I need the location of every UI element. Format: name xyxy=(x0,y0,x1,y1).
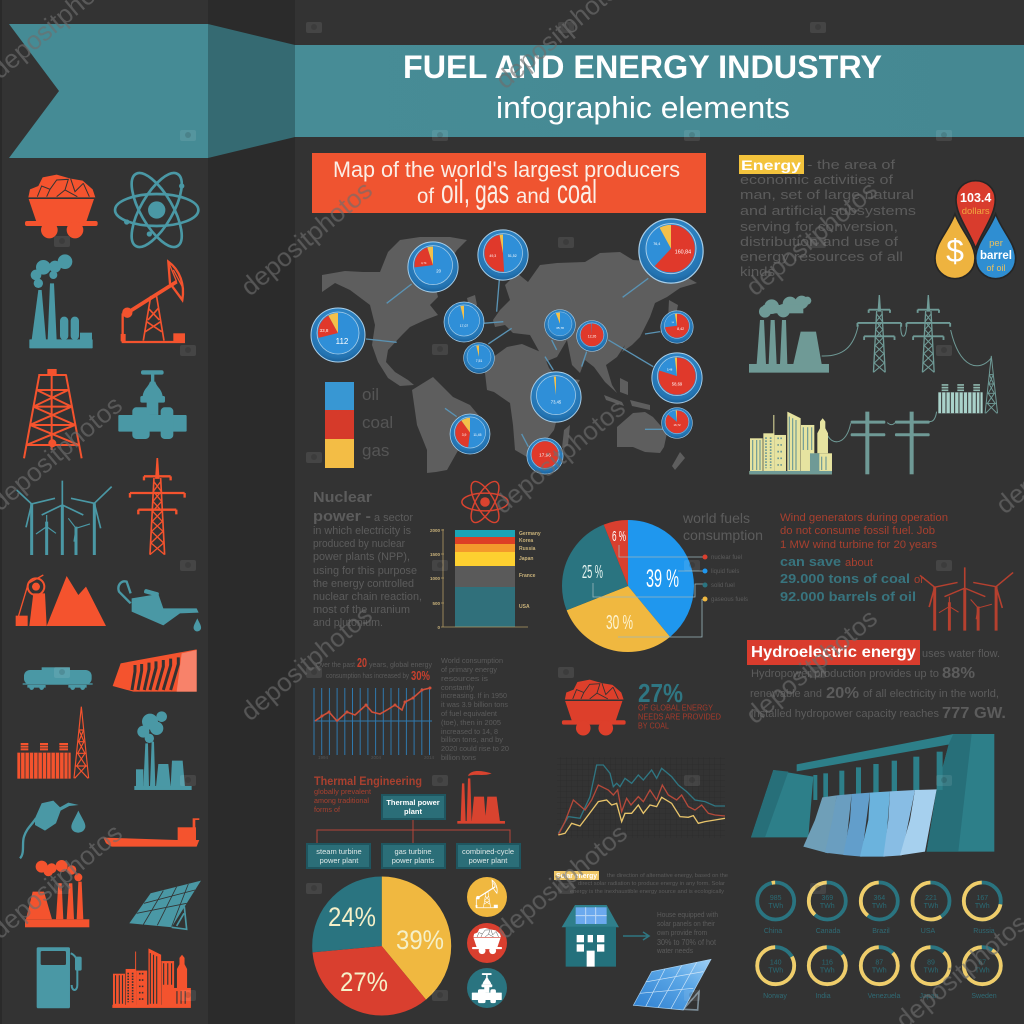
watermark text: depositphotos xyxy=(488,393,631,520)
hydroelectric text: 20% xyxy=(826,685,859,702)
donut: Venezuela: 87 xyxy=(875,960,883,967)
donut: Norway: TWh xyxy=(768,968,783,975)
donut: China: 985 xyxy=(770,895,782,902)
title: FUEL AND ENERGY INDUSTRY xyxy=(403,49,882,85)
coal statistic xyxy=(562,678,721,735)
thermal engineering text: forms of xyxy=(314,807,340,814)
stacked bar chart: USA xyxy=(519,604,530,610)
donut: India: 116 xyxy=(822,960,833,967)
world consumption text: increased to 14, 8 xyxy=(441,727,498,736)
pie bubble: Siberia: 76,4 xyxy=(653,242,660,246)
pie heading xyxy=(682,510,763,543)
map legend: oil xyxy=(362,385,379,404)
donut: Venezuela xyxy=(861,947,898,984)
mast xyxy=(985,356,998,413)
line chart: 1994 xyxy=(318,755,329,760)
donut: Sweden: TWh xyxy=(975,968,990,975)
box: steam turbine xyxy=(306,843,371,869)
sidebar icons xyxy=(16,166,201,1008)
icon: oil pump jack xyxy=(121,262,185,342)
stacked bar chart: 1500 xyxy=(430,552,440,557)
nuclear power text: the energy controlled xyxy=(313,578,414,590)
world consumption text: resources is xyxy=(441,674,488,683)
map heading banner: gas xyxy=(475,173,509,210)
energy definition text: kinds xyxy=(740,264,776,279)
pie legend: liquid fuels xyxy=(711,569,739,575)
donut: Venezuela: TWh xyxy=(872,968,887,975)
pie bubble: Middle East xyxy=(531,372,581,422)
icon: atom xyxy=(115,166,198,254)
oil price drops: dollars xyxy=(962,206,990,217)
root box: plant xyxy=(404,807,422,816)
solar energy text: the direction of alternative energy, based on the xyxy=(607,873,728,879)
line chart caption: consumption has increased by xyxy=(326,673,409,680)
pie bubble: Siberia xyxy=(639,219,703,283)
header band xyxy=(295,45,1024,137)
wind energy text: 29.000 tons of coal xyxy=(780,571,910,586)
pie bubble: North America: 112 xyxy=(336,337,349,346)
world consumption text: 2020 could rise to 20 xyxy=(441,744,509,753)
icon: coal mine xyxy=(16,575,106,626)
icon: solar panel xyxy=(129,881,201,929)
donut country labels: Sweden xyxy=(971,993,997,1000)
donut: USA: 221 xyxy=(925,895,937,902)
nuclear power text: Nuclear xyxy=(313,489,372,506)
coal statistic: OF GLOBAL ENERGY xyxy=(638,702,713,712)
energy definition text: Energy xyxy=(741,157,801,173)
hydro dam illustration xyxy=(751,734,994,857)
pie bubble: Canada: 4,74 xyxy=(421,261,427,265)
icon: oil can xyxy=(118,581,201,631)
box: gas turbine: power plants xyxy=(392,856,435,865)
donut: China: TWh xyxy=(768,903,783,910)
donut country labels: Brazil xyxy=(872,928,890,935)
stacked bar chart: Japan xyxy=(519,556,533,562)
energy definition text: distribution and use of xyxy=(740,234,898,249)
wind energy text: do not consume fossil fuel. Job xyxy=(780,525,935,537)
donut country labels: Japan xyxy=(919,993,939,1000)
nuclear power text: in which electricity is xyxy=(313,525,411,537)
donut: Norway: 140 xyxy=(770,960,782,967)
house caption: water needs xyxy=(656,946,693,955)
stacked bar chart: France xyxy=(519,573,536,579)
energy definition text: - the area of xyxy=(807,157,895,172)
map heading banner: and xyxy=(516,185,550,208)
pie bubble: South America: 3,9 xyxy=(462,433,467,437)
icon: red thermal plant xyxy=(457,771,505,824)
pie bubble: North Africa xyxy=(464,343,494,373)
hydroelectric text xyxy=(747,640,1006,722)
stacked bar chart: Korea xyxy=(519,538,533,544)
donut: Japan: 89 xyxy=(927,960,935,967)
factory xyxy=(749,296,829,373)
donut: Canada: 369 xyxy=(821,895,833,902)
donut: Canada: TWh xyxy=(820,903,835,910)
donut: USA xyxy=(912,882,950,920)
house caption: House equipped with xyxy=(657,910,718,919)
pie bubble: South Africa xyxy=(527,438,563,474)
stacked bar chart: Russia xyxy=(519,546,536,552)
thermal engineering text: globally prevalent xyxy=(314,789,371,796)
pie bubble: Japan xyxy=(661,311,693,343)
donut: Russia xyxy=(964,882,1001,920)
box: steam turbine: power plant xyxy=(320,856,359,865)
wind energy text: Wind generators during operation xyxy=(780,512,948,524)
world consumption text: increasing. If in 1950 xyxy=(441,691,507,700)
world consumption text xyxy=(441,656,509,762)
watermark text: depositphotos xyxy=(235,175,378,302)
pie bubble: Siberia: 160,84 xyxy=(675,249,691,255)
line chart: 2004 xyxy=(371,755,382,760)
nuclear power text: and plutonium. xyxy=(313,617,383,629)
nuclear power text: using for this purpose xyxy=(313,565,417,577)
donut country labels: Venezuela xyxy=(868,993,900,1000)
pie legend xyxy=(702,554,748,603)
icon: fuel pump xyxy=(37,947,82,1008)
donut: Russia: TWh xyxy=(975,903,990,910)
pie bubble: Canada xyxy=(408,242,458,292)
pie legend: gaseous fuels xyxy=(711,597,748,603)
house caption xyxy=(656,910,718,955)
pie bubble: Russia: 51,52 xyxy=(508,254,517,258)
pie bubble: Canada: 20 xyxy=(436,269,442,274)
blue solar panel xyxy=(633,959,711,1010)
wires xyxy=(822,325,991,442)
solar energy text: Solar energy xyxy=(556,873,597,880)
world consumption text: World consumption xyxy=(441,656,503,665)
world consumption text: billion tons xyxy=(441,753,476,762)
watermark text: depositphotos xyxy=(490,818,633,945)
world fuels pie chart: 6 % xyxy=(612,528,626,545)
wind energy text xyxy=(780,512,948,604)
world fuels pie chart xyxy=(582,528,705,637)
coal statistic: NEEDS ARE PROVIDED xyxy=(638,712,721,722)
multi-line chart xyxy=(557,757,725,838)
donut: Brazil: TWh xyxy=(872,903,887,910)
box: combined cycle xyxy=(456,843,521,869)
icon circle: coal xyxy=(467,923,507,963)
hydroelectric text: renewable and xyxy=(750,688,822,700)
watermark text: depositphotos xyxy=(740,175,883,302)
house caption: own provide from xyxy=(657,928,707,937)
world fuels pie chart: 30 % xyxy=(606,612,633,634)
icon circle: gas xyxy=(467,968,507,1008)
pie bubble: Australia: 16,72 xyxy=(673,423,681,427)
donut: Brazil xyxy=(861,882,898,920)
donut: Japan: TWh xyxy=(924,968,938,975)
hydroelectric text: installed hydropower capacity reaches xyxy=(751,708,939,720)
pie bubble: China: 5,48 xyxy=(667,368,673,372)
icon: red wind turbines xyxy=(920,567,1013,631)
pie bubble: West Europe xyxy=(444,302,484,342)
world consumption text: constantly xyxy=(441,683,474,692)
donut: India xyxy=(809,947,846,984)
hydroelectric text: 777 GW. xyxy=(942,705,1006,722)
world consumption text: of primary energy xyxy=(441,665,497,674)
oil price drops: 103.4 xyxy=(960,191,991,205)
icon: city skyline xyxy=(112,948,191,1008)
donut: USA: TWh xyxy=(924,903,938,910)
pie bubble: China xyxy=(652,353,702,403)
thermal engineering text: among traditional xyxy=(314,798,369,805)
icon circle: oil xyxy=(467,877,507,917)
fuel share pie chart: 24% xyxy=(328,902,376,932)
stacked bar chart: 1000 xyxy=(430,576,440,581)
pie bubble: Middle East: 73,45 xyxy=(551,400,562,405)
pie bubble: Russia: 49,3 xyxy=(489,254,496,258)
world consumption text: of fuel equivalent xyxy=(441,709,498,718)
energy definition text: and artificial subsystems xyxy=(740,203,917,218)
donut country labels: Canada xyxy=(816,928,840,935)
map leader lines xyxy=(366,278,663,447)
wind energy text: can save xyxy=(780,554,841,569)
box: steam turbine: steam turbine xyxy=(316,847,362,856)
oil price drops: per xyxy=(989,238,1003,249)
energy definition text: man, set of large natural xyxy=(740,187,914,202)
map heading banner: oil, xyxy=(441,173,470,210)
stacked bar chart: 500 xyxy=(432,601,440,606)
city xyxy=(749,412,832,474)
coal statistic: 27% xyxy=(638,678,683,708)
arrow xyxy=(623,932,649,940)
icon: factory with orange smoke xyxy=(25,860,89,927)
solar energy text: direct solar radiation to produce energy in any form. Solar xyxy=(578,881,725,887)
fuel share pie chart: 39% xyxy=(396,925,444,955)
root box xyxy=(381,794,446,820)
watermark text: depositphotos xyxy=(235,600,378,727)
ribbon banner left xyxy=(9,24,295,158)
icon: wind turbines xyxy=(17,481,112,555)
solar energy text: energy is the inexhaustible energy source and is ecologically xyxy=(570,889,724,895)
icon: red atom xyxy=(462,478,508,526)
energy definition text: economic activities of xyxy=(740,172,893,187)
oil price drops: barrel xyxy=(980,250,1012,262)
icon: hydro dam xyxy=(113,649,197,692)
icon: factory with smoke xyxy=(29,254,93,348)
hydroelectric text: Hydroelectric energy xyxy=(751,644,916,661)
map legend: coal xyxy=(362,413,393,432)
world map silhouette xyxy=(322,237,697,473)
world fuels pie chart: 39 % xyxy=(646,565,679,593)
pie bubble: Australia xyxy=(662,408,692,438)
donut country labels: Russia xyxy=(973,928,995,935)
nuclear power text: power plants (NPP), xyxy=(313,551,410,563)
nuclear power text xyxy=(313,489,422,629)
wind energy text: 1 MW wind turbine for 20 years xyxy=(780,539,938,551)
fuel share pie chart: 27% xyxy=(340,967,388,997)
donut: Russia: 167 xyxy=(976,895,988,902)
icon: fuel nozzle with drop xyxy=(20,801,85,858)
map legend xyxy=(325,382,393,468)
pie bubble: Central Asia xyxy=(545,310,575,340)
donut country labels: Norway xyxy=(763,993,787,1000)
map heading banner xyxy=(312,153,706,213)
hydroelectric text: of all electricity in the world, xyxy=(863,688,999,700)
oil price drops: of oil xyxy=(986,263,1006,273)
pie bubble: South Asia: 12,26 xyxy=(588,335,596,339)
world consumption text: it was 3.9 billion tons xyxy=(441,700,508,709)
poles xyxy=(851,412,930,474)
stacked bar chart: 0 xyxy=(437,625,440,630)
pie bubble: Russia xyxy=(478,230,528,280)
map heading banner: coal xyxy=(557,173,597,210)
wind energy text: 92.000 barrels of oil xyxy=(780,589,916,604)
subtitle: infographic elements xyxy=(496,90,790,125)
pie bubble: South America xyxy=(450,414,490,454)
nuclear power text: most of the uranium xyxy=(313,604,410,616)
power grid illustration xyxy=(749,295,998,474)
hydro capacity donuts xyxy=(757,882,1001,1000)
watermark text: depositphotos xyxy=(740,603,883,730)
wind energy text: or xyxy=(914,574,924,586)
pie bubble: South Africa: 17,96 xyxy=(539,453,551,458)
pie heading: world fuels xyxy=(682,510,750,526)
pie bubble: Japan: 8,42 xyxy=(677,327,684,331)
world consumption text: (toe), then in 2005 xyxy=(441,718,501,727)
nuclear power text: produced by nuclear xyxy=(313,538,405,550)
nuclear power text: a sector xyxy=(374,512,413,524)
energy definition text xyxy=(739,155,917,279)
fuel share pie chart xyxy=(328,902,444,997)
line chart caption: 20 xyxy=(357,655,367,670)
line chart caption: years, global energy xyxy=(369,662,432,669)
icon: coal cart xyxy=(25,175,98,238)
nuclear power text: power - xyxy=(313,508,371,525)
pie bubble: West Europe: 17,07 xyxy=(460,324,468,328)
wind energy text: about xyxy=(845,557,873,569)
donut: Sweden: 67 xyxy=(978,960,986,967)
transformer xyxy=(938,385,983,413)
pylons xyxy=(857,295,950,372)
donut: Canada xyxy=(809,882,846,920)
donut: China xyxy=(757,882,794,920)
pie bubble: China: 58,69 xyxy=(672,381,683,386)
house caption: 30% to 70% of hot xyxy=(657,937,717,947)
stacked bar chart xyxy=(430,528,541,630)
pie heading: consumption xyxy=(683,527,763,543)
stacked bar chart: Germany xyxy=(519,531,541,537)
pie bubble: North America xyxy=(311,308,365,362)
energy definition text: energy resources of all xyxy=(740,249,903,264)
line chart: 2014 xyxy=(424,755,435,760)
house caption: solar panels on their xyxy=(657,919,715,928)
donut country labels: India xyxy=(815,993,831,1000)
hydroelectric text: Hydropower production provides up to xyxy=(751,668,939,680)
root box: Thermal power xyxy=(386,798,440,807)
pie bubble: South America: 11,45 xyxy=(473,433,482,437)
pie bubble: Central Asia: 35,78 xyxy=(556,326,564,330)
hydroelectric text: 88% xyxy=(942,665,975,682)
coal statistic: BY COAL xyxy=(638,720,669,730)
thermal engineering text: Thermal Engineering xyxy=(314,776,422,788)
donut: Japan xyxy=(912,947,950,984)
oil price drops xyxy=(935,181,1016,279)
line chart caption: Over the past xyxy=(316,662,355,669)
energy definition text: serving for conversion, xyxy=(740,219,898,234)
donut: Norway xyxy=(757,947,794,984)
donut country labels xyxy=(763,928,997,1000)
line chart caption: 30% xyxy=(411,668,430,683)
pie legend: solid fuel xyxy=(711,583,735,589)
nuclear power text: nuclear chain reaction, xyxy=(313,591,422,603)
map heading banner: Map of the world's largest producers xyxy=(333,157,680,182)
pie bubble: Japan: 3,6 xyxy=(672,322,674,324)
thermal plant tree xyxy=(306,794,521,869)
stacked bar chart: 2000 xyxy=(430,528,440,533)
map heading banner: of xyxy=(417,185,434,208)
line chart xyxy=(314,686,435,760)
pie bubble: North Africa: 7,51 xyxy=(476,359,482,363)
world consumption text: billion tons, and by xyxy=(441,735,503,744)
pie bubble: South Asia xyxy=(577,321,607,351)
pie legend: nuclear fuel xyxy=(711,555,742,561)
icon: rail tank car xyxy=(23,667,93,690)
donut: Brazil: 364 xyxy=(873,895,885,902)
box: gas turbine xyxy=(381,843,446,869)
box: combined cycle: combined-cycle xyxy=(462,847,514,856)
icon: thermal power plant xyxy=(134,711,192,790)
icon: oil derrick xyxy=(24,370,82,458)
donut country labels: China xyxy=(764,928,782,935)
world fuels pie chart: 25 % xyxy=(582,562,603,582)
icon: power pylon xyxy=(130,458,185,555)
line chart caption xyxy=(316,655,432,683)
house with solar roof xyxy=(562,905,619,967)
map legend: gas xyxy=(362,441,389,460)
hydroelectric text: uses water flow. xyxy=(922,648,1000,660)
icon: pipe valve xyxy=(118,370,187,439)
box: combined cycle: power plant xyxy=(469,856,508,865)
oil price drops: $ xyxy=(946,233,964,269)
icon: oil tanker ship xyxy=(103,818,199,847)
solar energy text xyxy=(554,871,728,895)
box: gas turbine: gas turbine xyxy=(394,847,432,856)
donut: Sweden xyxy=(964,947,1001,984)
thermal engineering text xyxy=(314,776,422,814)
icon: transformer and mast xyxy=(17,707,89,779)
donut: India: TWh xyxy=(820,968,835,975)
donut country labels: USA xyxy=(921,928,936,935)
pie bubble: North America: 33,8 xyxy=(320,328,329,333)
